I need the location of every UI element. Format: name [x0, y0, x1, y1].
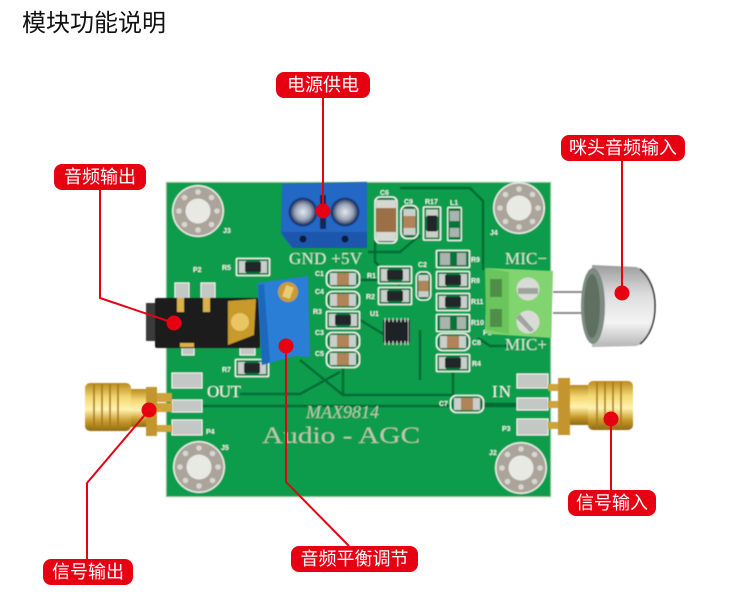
silkscreen labels: J2 [489, 450, 497, 457]
mounting hole J2 [495, 442, 547, 494]
silkscreen labels: C4 [315, 289, 324, 296]
callout: 电源供电 [276, 72, 370, 218]
callout: 信号输出: 信号输出 [52, 562, 124, 582]
icon: microphone capsule [553, 265, 655, 347]
silkscreen labels: R5 [222, 265, 231, 272]
silkscreen labels: C7 [439, 401, 448, 408]
silkscreen labels: P4 [206, 429, 215, 436]
icon: SMA connector left [85, 383, 172, 436]
silkscreen labels: R1 [367, 273, 376, 280]
silkscreen: Audio - AGC: Audio - AGC [262, 423, 420, 448]
silkscreen labels: L1 [450, 200, 458, 207]
callout: 信号输出 [43, 402, 156, 585]
silkscreen labels: R17 [425, 199, 438, 206]
silkscreen labels: C1 [315, 271, 324, 278]
silkscreen labels: R11 [471, 299, 484, 306]
silkscreen labels: R3 [313, 309, 322, 316]
callout: 音频平衡调节: 音频平衡调节 [300, 549, 408, 569]
silkscreen labels: R9 [471, 257, 480, 264]
silkscreen labels: R2 [366, 294, 375, 301]
title: 模块功能说明 [22, 10, 166, 37]
silkscreen: IN: IN [492, 382, 511, 401]
silkscreen labels: R7 [222, 367, 231, 374]
icon: green terminal [485, 268, 553, 338]
silkscreen labels: J5 [221, 445, 229, 452]
callout: 音频平衡调节 [278, 338, 418, 572]
silkscreen labels: C3 [315, 330, 324, 337]
silkscreen labels: C6 [380, 190, 389, 197]
callout: 信号输入: 信号输入 [576, 493, 648, 513]
silkscreen labels [193, 190, 511, 457]
icon: audio jack [146, 298, 260, 348]
silkscreen labels: C8 [472, 340, 481, 347]
callout: 电源供电: 电源供电 [287, 75, 359, 95]
icon: blue trimmer potentiometer [257, 276, 310, 365]
SMD components [236, 197, 484, 412]
mounting hole J5 [173, 441, 225, 493]
callout: 音频输出: 音频输出 [64, 167, 136, 187]
pads [172, 283, 548, 435]
silkscreen labels: R10 [471, 320, 484, 327]
callout: 音频输出 [54, 164, 182, 330]
silkscreen: MIC+: MIC+ [505, 335, 547, 354]
silkscreen: MIC-: MIC− [505, 249, 547, 268]
icon: blue power terminal [281, 182, 367, 248]
callout: 咪头音频输入 [561, 135, 685, 300]
mounting hole J4 [493, 182, 545, 234]
mounting hole J3 [172, 185, 224, 237]
silkscreen: GND +5V: GND +5V [289, 249, 363, 268]
silkscreen labels: C9 [404, 199, 413, 206]
icon: SMA connector right [548, 378, 633, 435]
silkscreen labels: J3 [223, 228, 231, 235]
silkscreen labels: J4 [490, 230, 498, 237]
pcb traces [172, 188, 520, 406]
callout: 信号输入 [568, 412, 656, 516]
callout: 咪头音频输入: 咪头音频输入 [569, 138, 677, 158]
silkscreen: OUT: OUT [207, 382, 242, 401]
silkscreen labels: R4 [472, 361, 481, 368]
silkscreen labels: U1 [370, 311, 379, 318]
silkscreen labels: P2 [193, 267, 202, 274]
silkscreen labels: P3 [502, 426, 511, 433]
silkscreen labels: C5 [315, 351, 324, 358]
silkscreen: MAX9814: MAX9814 [305, 402, 379, 422]
silkscreen labels: P1 [483, 330, 492, 337]
silkscreen labels: R8 [471, 278, 480, 285]
chip U1 [383, 318, 410, 345]
silkscreen labels: C2 [418, 262, 427, 269]
panel: PCB board [166, 182, 551, 497]
